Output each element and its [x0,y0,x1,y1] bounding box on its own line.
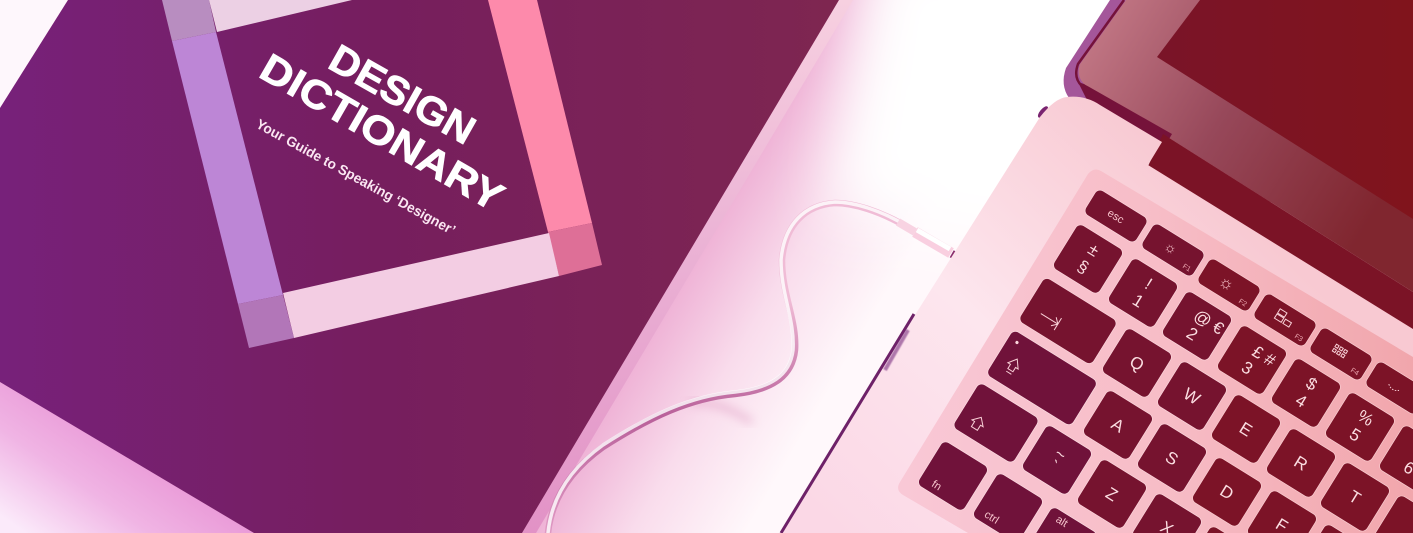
book title [252,37,511,238]
lid inner dark line [1076,0,1124,86]
cable connector [898,222,955,258]
key: alt [1025,506,1099,533]
hinge band [1148,134,1413,332]
cover frame: pink corner [548,223,602,276]
book [0,0,853,533]
key: fn [916,440,990,512]
key: tilde: ` [1046,457,1060,476]
key: F3 [1252,292,1318,348]
key: alt: alt [1054,514,1070,530]
cover frame: pink strip [488,0,592,232]
key: S [1135,422,1209,494]
key: 5: % [1354,406,1377,430]
key: 3 [1215,324,1289,396]
key: 4: $ [1303,374,1321,395]
deck slit [781,314,914,533]
key: section sign [1051,223,1125,295]
key: Q [1100,327,1174,399]
key: F3: F3 [1293,333,1304,343]
slit shadow [885,330,908,370]
key: 6 [1377,424,1413,496]
key: 2 [1160,290,1234,362]
cover frame: bottom pale strip [283,233,559,338]
keyboard well [898,170,1413,533]
cable shadow [690,402,752,422]
key: 4 [1269,357,1343,429]
key: 1: 1 [1129,291,1147,312]
key: ctrl: ctrl [982,509,1001,527]
key: 4: 4 [1292,391,1310,412]
key: R: R [1291,452,1311,475]
key: 3: 3 [1238,358,1256,379]
key: S: S [1162,447,1182,469]
key: Q: Q [1126,352,1147,375]
charging cable [548,202,900,533]
key: fn: fn [929,478,943,493]
key: 2: @ € [1190,306,1228,339]
key: T: T [1345,487,1364,508]
cover frame: top-left corner [162,0,216,41]
key: R [1264,427,1338,499]
key: G [1299,523,1373,533]
key: F5 [1364,360,1413,416]
key: shift [952,382,1040,464]
top-left desk corner [0,0,68,108]
title line: DESIGN: DESIGN [322,37,483,153]
key: F1: F1 [1181,263,1192,273]
key: F2 [1196,257,1262,313]
key: A [1081,389,1155,461]
key: F4: F4 [1349,367,1360,377]
key: esc: esc [1105,207,1126,227]
laptop deck [782,97,1413,533]
key: 3: £ # [1249,342,1279,371]
title line: DICTIONARY: DICTIONARY [252,46,511,220]
book cover [0,0,839,533]
key: tab [1018,276,1118,366]
key: X [1130,492,1204,533]
key: C [1184,525,1258,533]
lid bezel [1079,0,1413,292]
key: F1: ☼ [1161,237,1181,258]
laptop [781,0,1413,533]
key: F [1245,489,1319,533]
keyboard [916,188,1413,533]
key: caps lock [986,329,1098,427]
key: Y [1372,494,1413,533]
key: Z [1075,458,1149,530]
lid outer edge [1064,0,1126,105]
cover frame: top pale strip [209,0,352,32]
key: F4 [1308,326,1374,382]
key: section sign: ± [1085,240,1103,261]
key: A: A [1108,414,1128,437]
key: tilde [1020,424,1094,496]
key: Z: Z [1102,484,1121,505]
key: E: E [1236,418,1256,440]
screen [1157,0,1413,219]
key: 2: 2 [1183,324,1201,345]
key: W [1155,360,1229,432]
cover frame: purple corner [238,295,294,348]
key: esc [1083,188,1149,244]
key: W: W [1180,384,1204,409]
key: ctrl [971,472,1045,533]
desk highlight near top [830,0,1180,250]
key: F2: ☼ [1215,271,1238,295]
key: E [1209,393,1283,465]
key: 5: 5 [1346,425,1364,446]
key: 1 [1106,257,1180,329]
key: section sign: § [1074,257,1092,278]
lid lower dark seam [1078,82,1172,146]
key: D: D [1217,481,1237,504]
bottom-left desk corner [0,382,254,533]
book page edge [522,0,853,533]
key: D [1190,456,1264,528]
key: F1 [1140,222,1206,278]
key: T [1318,461,1392,533]
key: tilde: ~ [1051,444,1070,465]
subtitle: Your Guide to Speaking ‘Designer’ [254,116,458,238]
key: 5 [1323,391,1397,463]
cover frame: purple strip [172,32,283,304]
key: F2: F2 [1237,298,1248,308]
key: 1: ! [1142,275,1156,293]
deck side nub [1036,105,1050,119]
